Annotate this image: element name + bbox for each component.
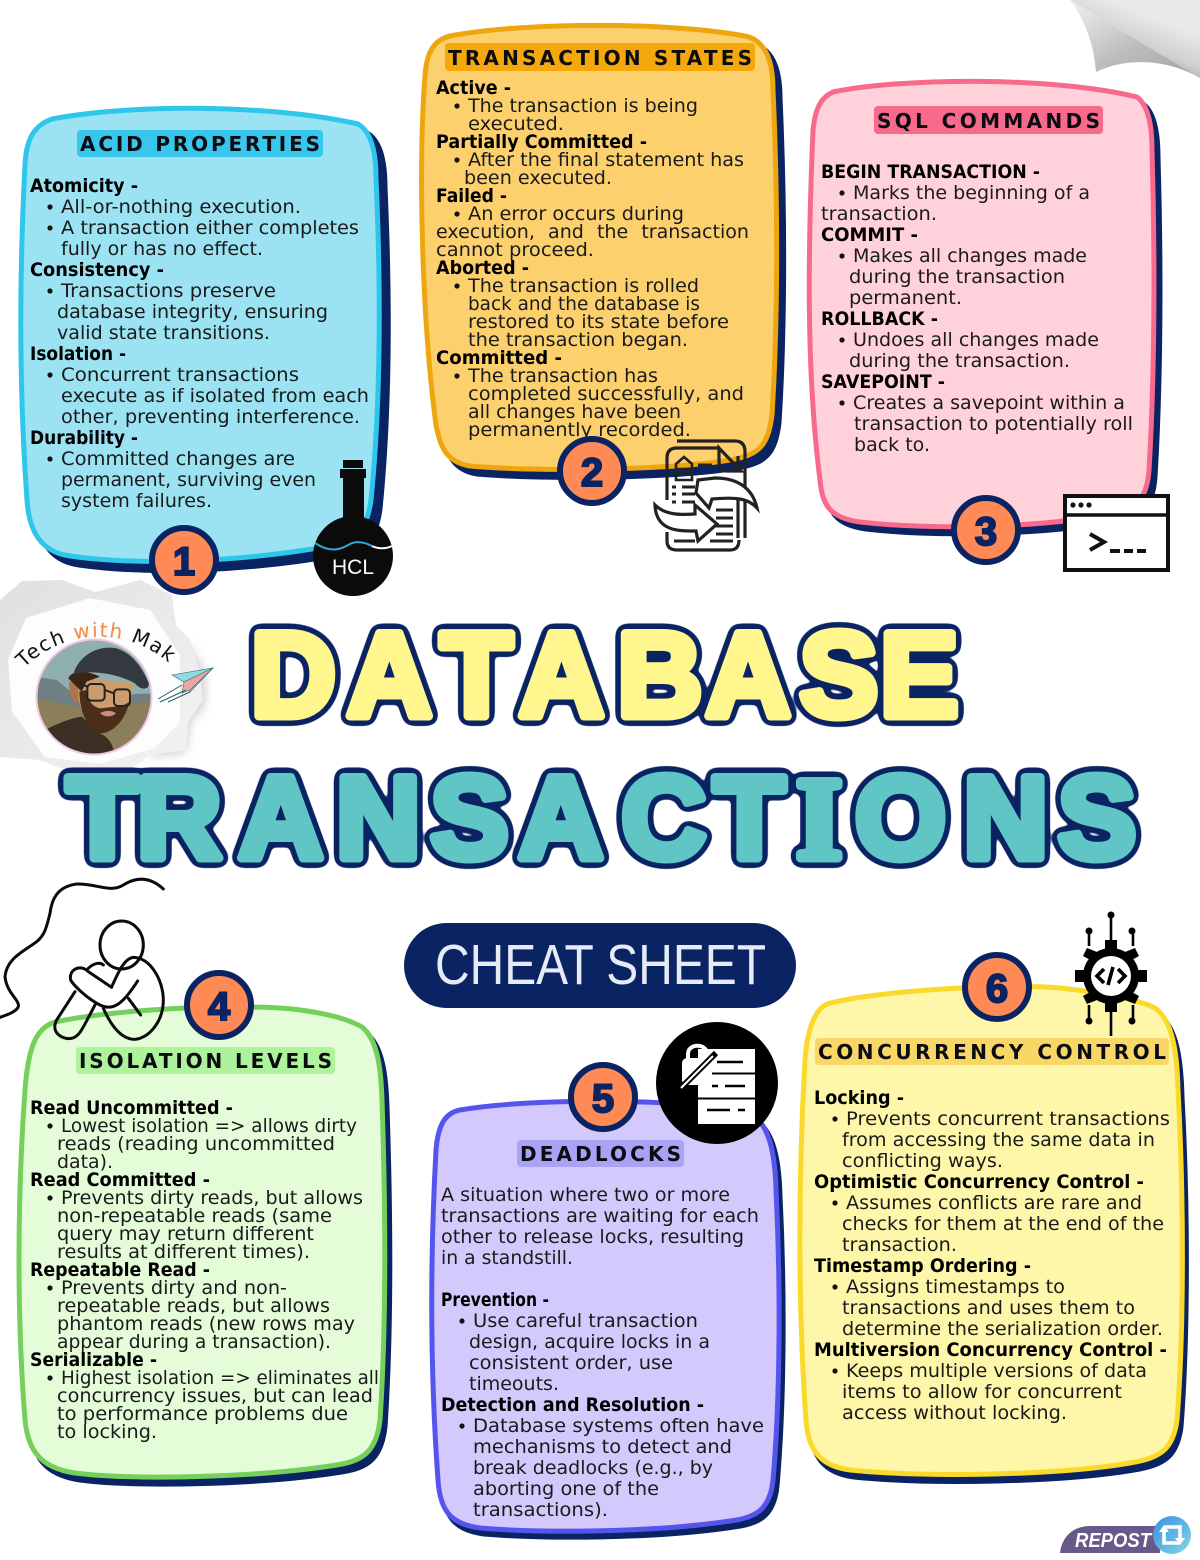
panel: sql commands: [809, 81, 1160, 534]
text: acid properties: valid state transitions.: [57, 322, 270, 344]
text: acid properties: Durability -: [30, 427, 138, 449]
logo text: Tech with Mak: [14, 622, 176, 664]
text: concurrency control: determine the serialization order.: [842, 1318, 1163, 1340]
text: acid properties: fully or has no effect.: [61, 238, 263, 260]
text: isolation levels: reads (reading uncommitted: [57, 1133, 335, 1155]
badge 4: 4: [208, 985, 231, 1029]
text: transaction states: been executed.: [464, 167, 612, 189]
text: concurrency control: conflicting ways.: [842, 1150, 1003, 1172]
icon: code gear: [1075, 912, 1147, 1036]
text: transaction states: An error occurs during: [468, 203, 684, 225]
text: sql commands: during the transaction: [849, 266, 1065, 288]
text: acid properties: Committed changes are: [61, 448, 295, 470]
text: sql commands: SAVEPOINT -: [821, 371, 945, 393]
badge 6: [965, 955, 1029, 1019]
badge 5: 5: [592, 1077, 614, 1121]
text: deadlocks: design, acquire locks in a: [469, 1331, 710, 1353]
text: isolation levels: Prevents dirty and non-: [61, 1277, 287, 1299]
badge 3: 3: [975, 510, 997, 554]
text: isolation levels: Highest isolation => eliminates all: [61, 1367, 379, 1389]
text: sql commands: Creates a savepoint within a: [853, 392, 1125, 414]
text: deadlocks: Prevention -: [441, 1289, 549, 1311]
text: acid properties: Consistency -: [30, 259, 164, 281]
text: transaction states: After the final statement has: [468, 149, 744, 171]
text: sql commands: Undoes all changes made: [853, 329, 1099, 351]
text: concurrency control: Optimistic Concurrency Control -: [814, 1171, 1144, 1193]
text: concurrency control: Keeps multiple versions of data: [846, 1360, 1147, 1382]
text: transaction states: all changes have been: [468, 401, 681, 423]
cheat sheet pill: [404, 923, 796, 1008]
text: deadlocks: mechanisms to detect and: [473, 1436, 732, 1458]
text: acid properties: other, preventing interference.: [61, 406, 360, 428]
text: isolation levels: Lowest isolation => allows dirty: [61, 1115, 357, 1137]
text: isolation levels: to locking.: [57, 1421, 157, 1443]
panel: isolation levels: [19, 1007, 390, 1484]
text: acid properties: Isolation -: [30, 343, 126, 365]
text: concurrency control: transaction.: [842, 1234, 957, 1256]
page curl: [1070, 0, 1200, 78]
text: acid properties: execute as if isolated from each: [61, 385, 369, 407]
text: transaction states: cannot proceed.: [436, 239, 594, 261]
badge 2: [560, 439, 624, 503]
cheat sheet pill: CHEAT SHEET: [435, 933, 766, 997]
badge 6: 6: [986, 967, 1008, 1011]
text: concurrency control: Assumes conflicts are rare and: [846, 1192, 1142, 1214]
text: isolation levels: Repeatable Read -: [30, 1259, 210, 1281]
text: acid properties: permanent, surviving even: [61, 469, 316, 491]
heading: concurrency control: CONCURRENCY CONTROL: [818, 1040, 1166, 1064]
text: isolation levels: Prevents dirty reads, but allows: [61, 1187, 363, 1209]
heading: transaction states: TRANSACTION STATES: [448, 46, 752, 70]
text: isolation levels: Serializable -: [30, 1349, 157, 1371]
icon: sitting figure with squiggle: [0, 879, 163, 1039]
text: deadlocks: Database systems often have: [473, 1415, 764, 1437]
text: acid properties: Concurrent transactions: [61, 364, 299, 386]
text: acid properties: Transactions preserve: [60, 280, 276, 302]
text: sql commands: Makes all changes made: [853, 245, 1087, 267]
text: concurrency control: Multiversion Concurrency Control -: [814, 1339, 1167, 1361]
text: transaction states: Committed -: [436, 347, 562, 369]
text: transaction states: permanently recorded.: [468, 419, 691, 441]
icon: locked document: [656, 1022, 778, 1144]
text: deadlocks: Detection and Resolution -: [441, 1394, 704, 1416]
text: concurrency control: [814, 1087, 1170, 1424]
text: sql commands: transaction.: [821, 203, 937, 225]
text: isolation levels: Read Uncommitted -: [30, 1097, 233, 1119]
text: isolation levels: results at different times).: [57, 1241, 310, 1263]
text: concurrency control: access without locking.: [842, 1402, 1067, 1424]
text: isolation levels: data).: [57, 1151, 113, 1173]
text: transaction states: Aborted -: [436, 257, 529, 279]
icon: paper plane: [158, 668, 213, 702]
text: concurrency control: Prevents concurrent transactions: [846, 1108, 1170, 1130]
text: isolation levels: [30, 1097, 379, 1443]
text: transaction states: Partially Committed -: [436, 131, 647, 153]
text: isolation levels: appear during a transaction).: [57, 1331, 331, 1353]
text: transaction states: The transaction is rolled: [467, 275, 699, 297]
text: transaction states: [436, 77, 749, 441]
text: concurrency control: items to allow for concurrent: [842, 1381, 1122, 1403]
text: concurrency control: Timestamp Ordering -: [814, 1255, 1031, 1277]
text: transaction states: execution, and the transaction: [436, 221, 749, 243]
badge 5: [571, 1065, 635, 1129]
text: concurrency control: checks for them at the end of the: [842, 1213, 1164, 1235]
text: concurrency control: transactions and uses them to: [842, 1297, 1135, 1319]
text: acid properties: All-or-nothing execution.: [61, 196, 301, 218]
text: deadlocks: transactions are waiting for each: [441, 1205, 759, 1227]
text: transaction states: The transaction is being: [467, 95, 698, 117]
text: deadlocks: other to release locks, resulting: [441, 1226, 744, 1248]
text: deadlocks: Use careful transaction: [473, 1310, 698, 1332]
panel: concurrency control: [800, 986, 1186, 1481]
text: isolation levels: phantom reads (new rows may: [57, 1313, 355, 1335]
badge 3: [954, 498, 1018, 562]
text: deadlocks: transactions).: [473, 1499, 608, 1521]
text: transaction states: completed successfully, and: [468, 383, 744, 405]
text: deadlocks: consistent order, use: [469, 1352, 673, 1374]
text: acid properties: Atomicity -: [30, 175, 138, 197]
panel: transaction states: [422, 25, 784, 477]
icon: hcl flask: [313, 460, 393, 596]
text: sql commands: transaction to potentially roll: [854, 413, 1133, 435]
panel: acid properties: [21, 108, 388, 570]
heading: isolation levels: ISOLATION LEVELS: [79, 1049, 332, 1073]
text: transaction states: the transaction began.: [468, 329, 688, 351]
text: transaction states: restored to its state before: [468, 311, 729, 333]
badge 1: 1: [173, 540, 195, 584]
text: deadlocks: A situation where two or more: [441, 1184, 730, 1206]
logo: tech with mak: [0, 580, 214, 768]
badge 4: [187, 973, 251, 1037]
text: sql commands: COMMIT -: [821, 224, 918, 246]
text: isolation levels: repeatable reads, but allows: [57, 1295, 330, 1317]
text: deadlocks: aborting one of the: [473, 1478, 659, 1500]
text: sql commands: Marks the beginning of a: [853, 182, 1090, 204]
icon: document exchange: [655, 441, 757, 550]
text: isolation levels: to performance problems due: [57, 1403, 348, 1425]
heading: acid properties: ACID PROPERTIES: [80, 132, 320, 156]
text: sql commands: back to.: [854, 434, 930, 456]
badge 2: 2: [581, 451, 603, 495]
text: transaction states: back and the database is: [468, 293, 700, 315]
text: transaction states: Active -: [436, 77, 511, 99]
text: isolation levels: query may return different: [57, 1223, 314, 1245]
text: deadlocks: timeouts.: [469, 1373, 559, 1395]
text: concurrency control: from accessing the same data in: [842, 1129, 1155, 1151]
text: sql commands: [821, 161, 1133, 456]
text: concurrency control: Locking -: [814, 1087, 904, 1109]
badge 1: [152, 528, 216, 592]
text: deadlocks: [441, 1184, 764, 1521]
text: concurrency control: Assigns timestamps to: [846, 1276, 1065, 1298]
icon: terminal window: [1065, 496, 1168, 570]
text: acid properties: database integrity, ensuring: [57, 301, 328, 323]
text: acid properties: A transaction either completes: [61, 217, 359, 239]
text: sql commands: permanent.: [849, 287, 962, 309]
text: isolation levels: non-repeatable reads (same: [57, 1205, 332, 1227]
title: database: DATABASE: [251, 608, 958, 742]
title: transactions: TRANSACTIONS: [67, 752, 1136, 884]
text: transaction states: The transaction has: [467, 365, 658, 387]
panel: deadlocks: [432, 1101, 783, 1537]
heading: deadlocks: DEADLOCKS: [520, 1142, 681, 1166]
text: acid properties: [30, 175, 369, 512]
text: isolation levels: Read Committed -: [30, 1169, 210, 1191]
text: sql commands: during the transaction.: [849, 350, 1070, 372]
icon: hcl flask: HCL: [332, 556, 374, 579]
text: isolation levels: concurrency issues, but can lead: [57, 1385, 373, 1407]
text: deadlocks: break deadlocks (e.g., by: [473, 1457, 713, 1479]
repost badge: [1060, 1516, 1191, 1554]
heading: sql commands: SQL COMMANDS: [877, 109, 1100, 133]
text: sql commands: BEGIN TRANSACTION -: [821, 161, 1040, 183]
text: transaction states: Failed -: [436, 185, 507, 207]
text: deadlocks: in a standstill.: [441, 1247, 573, 1269]
repost badge: REPOST: [1075, 1530, 1153, 1552]
text: acid properties: system failures.: [61, 490, 212, 512]
text: sql commands: ROLLBACK -: [821, 308, 938, 330]
text: transaction states: executed.: [468, 113, 564, 135]
